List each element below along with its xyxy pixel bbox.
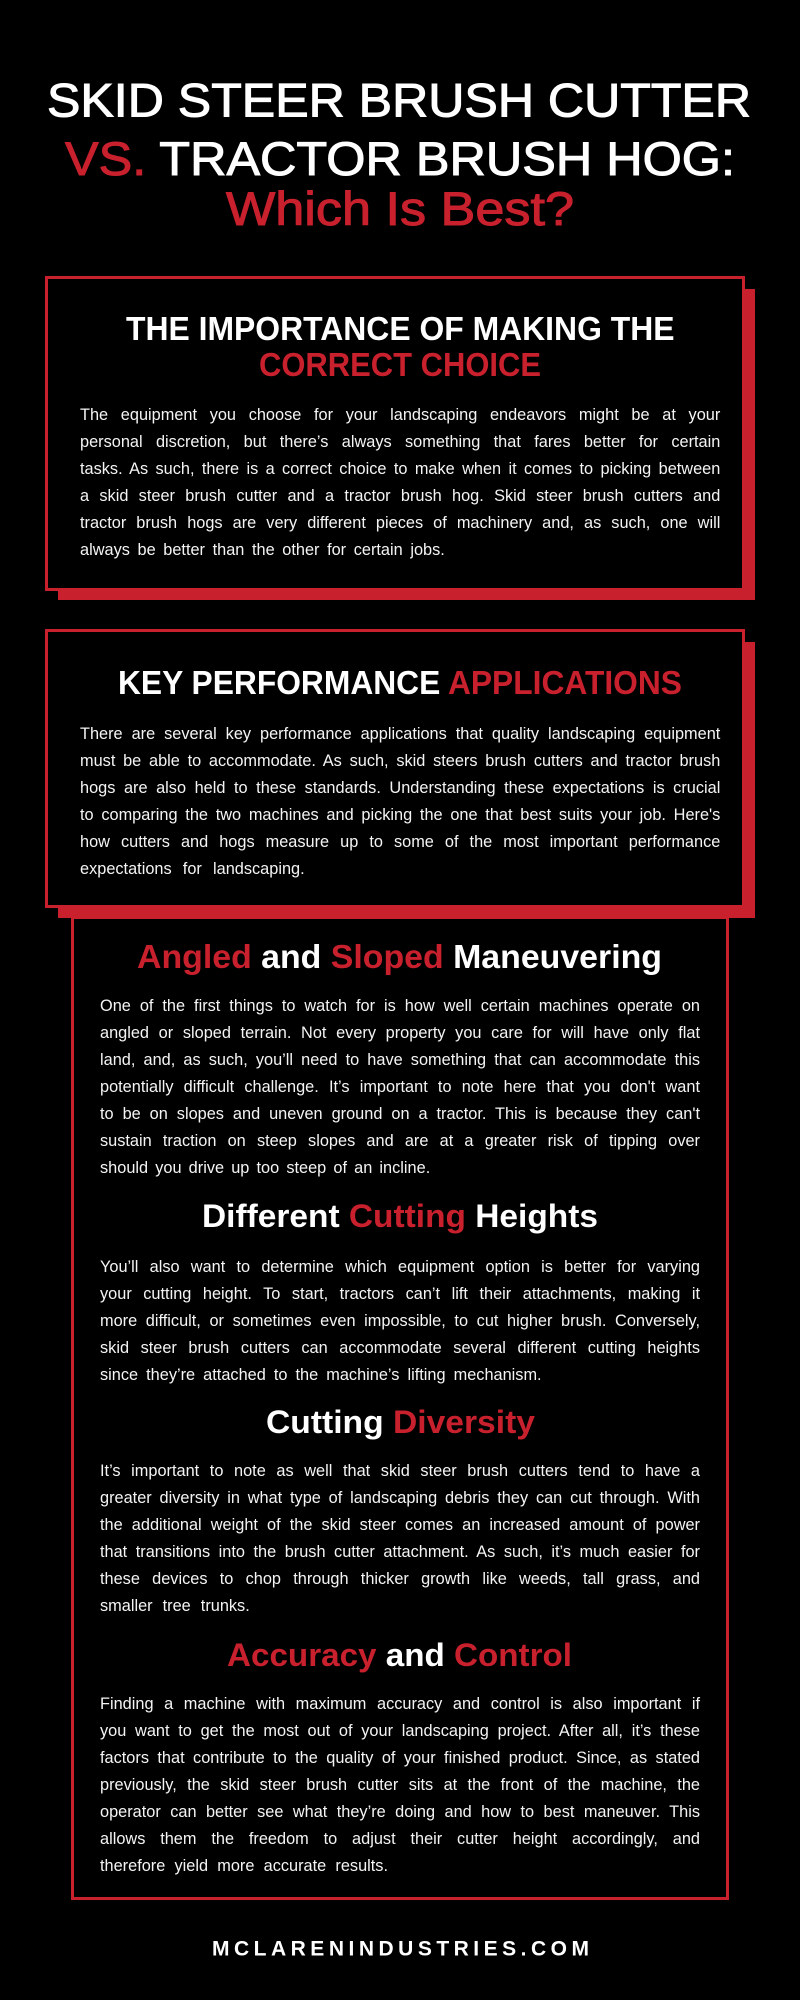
text: cutting diversity: smaller tree trunks. — [100, 1596, 250, 1615]
title: SKID STEER BRUSH CUTTER — [47, 74, 751, 128]
text: key performance paragraph: how cutters and hogs measure up to some of the most important performance — [80, 832, 720, 851]
text: accuracy and control: Finding a machine with maximum accuracy and control is also important if — [100, 1694, 700, 1713]
heading: different cutting heights: Different Cutting Heights — [202, 1198, 598, 1234]
heading: key performance applications: KEY PERFORMANCE APPLICATIONS — [118, 665, 682, 702]
text: cutting diversity: these devices to chop through thicker growth like weeds, tall grass, and — [100, 1569, 700, 1588]
text: key performance paragraph: must be able to accommodate. As such, skid steers brush cutters and tractor brush — [80, 751, 720, 770]
text: angled and sloped maneuvering: should you drive up too steep of an incline. — [100, 1158, 430, 1177]
text: angled and sloped maneuvering: land, and, as such, you’ll need to have something that can accommodate this — [100, 1050, 700, 1069]
heading: accuracy and control: Accuracy and Control — [227, 1637, 572, 1673]
text: different cutting heights: You’ll also want to determine which equipment option is better for varying — [100, 1257, 700, 1276]
text: angled and sloped maneuvering — [100, 996, 700, 1177]
text: accuracy and control: previously, the skid steer brush cutter sits at the front of the machine, the — [100, 1775, 700, 1794]
heading: the importance of making the correct choice — [126, 311, 674, 384]
text: importance paragraph: The equipment you choose for your landscaping endeavors might be at your — [80, 405, 720, 424]
text: importance paragraph: personal discretion, but there’s always something that fares better for certain — [80, 432, 720, 451]
text: key performance paragraph: to comparing the two machines and picking the one that best suits your job. Here's — [80, 805, 720, 824]
text: accuracy and control: factors that contribute to the quality of your finished product. Since, as stated — [100, 1748, 700, 1767]
text: importance paragraph: tractor brush hogs are very different pieces of machinery and, as such, one will — [80, 513, 720, 532]
text: accuracy and control: allows them the freedom to adjust their cutter height accordingly, and — [100, 1829, 700, 1848]
text: key performance paragraph — [80, 724, 720, 878]
text: accuracy and control: operator can better see what they’re doing and how to best maneuver. This — [100, 1802, 700, 1821]
text: different cutting heights — [100, 1257, 700, 1384]
footer: website: MCLARENINDUSTRIES.COM — [212, 1938, 589, 1960]
title — [47, 74, 751, 236]
text: different cutting heights: more difficult, or sometimes even impossible, to cut higher brush. Conversely, — [100, 1311, 700, 1330]
text: different cutting heights: since they’re attached to the machine’s lifting mechanism. — [100, 1365, 542, 1384]
text: angled and sloped maneuvering: angled or sloped terrain. Not every property you care for will have only flat — [100, 1023, 700, 1042]
text: importance paragraph — [80, 405, 720, 559]
text: cutting diversity: greater diversity in what type of landscaping debris they can cut through. With — [100, 1488, 700, 1507]
text: key performance paragraph: hogs are also held to these standards. Understanding these expectations is crucial — [80, 778, 720, 797]
panel: key sections list — [71, 918, 729, 1900]
title: Which Is Best? — [226, 183, 574, 236]
text: cutting diversity: the additional weight of the skid steer comes an increased amount of power — [100, 1515, 700, 1534]
text: importance paragraph: always be better than the other for certain jobs. — [80, 540, 445, 559]
text: accuracy and control — [100, 1694, 700, 1875]
text: key performance paragraph: expectations for landscaping. — [80, 859, 305, 878]
panel: the importance of making the correct choice — [45, 276, 755, 600]
text: angled and sloped maneuvering: One of the first things to watch for is how well certain machines operate on — [100, 996, 700, 1015]
heading: angled and sloped maneuvering: Angled and Sloped Maneuvering — [137, 938, 662, 975]
text: cutting diversity: that transitions into the brush cutter attachment. As such, it’s much easier for — [100, 1542, 700, 1561]
panel: key performance applications — [45, 629, 755, 918]
heading: the importance of making the correct choice: THE IMPORTANCE OF MAKING THE — [126, 311, 674, 348]
text: different cutting heights: skid steer brush cutters can accommodate several different cutting heights — [100, 1338, 700, 1357]
text: importance paragraph: tasks. As such, there is a correct choice to make when it comes to picking between — [80, 459, 720, 478]
heading: cutting diversity: Cutting Diversity — [266, 1404, 535, 1440]
text: angled and sloped maneuvering: to be on slopes and uneven ground on a tractor. This is because they can't — [100, 1104, 700, 1123]
text: key performance paragraph: There are several key performance applications that quality landscaping equipment — [80, 724, 720, 743]
title: VS. TRACTOR BRUSH HOG: — [65, 133, 735, 186]
text: angled and sloped maneuvering: potentially difficult challenge. It’s important to note here that you don't want — [100, 1077, 700, 1096]
text: importance paragraph: a skid steer brush cutter and a tractor brush hog. Skid steer brush cutters and — [80, 486, 720, 505]
text: angled and sloped maneuvering: sustain traction on steep slopes and are at a greater risk of tipping over — [100, 1131, 700, 1150]
text: different cutting heights: your cutting height. To start, tractors can’t lift their attachments, making it — [100, 1284, 700, 1303]
text: accuracy and control: you want to get the most out of your landscaping project. After all, it’s these — [100, 1721, 700, 1740]
text: cutting diversity — [100, 1461, 700, 1615]
heading: the importance of making the correct choice: CORRECT CHOICE — [259, 347, 541, 384]
text: cutting diversity: It’s important to note as well that skid steer brush cutters tend to have a — [100, 1461, 700, 1480]
text: accuracy and control: therefore yield more accurate results. — [100, 1856, 388, 1875]
